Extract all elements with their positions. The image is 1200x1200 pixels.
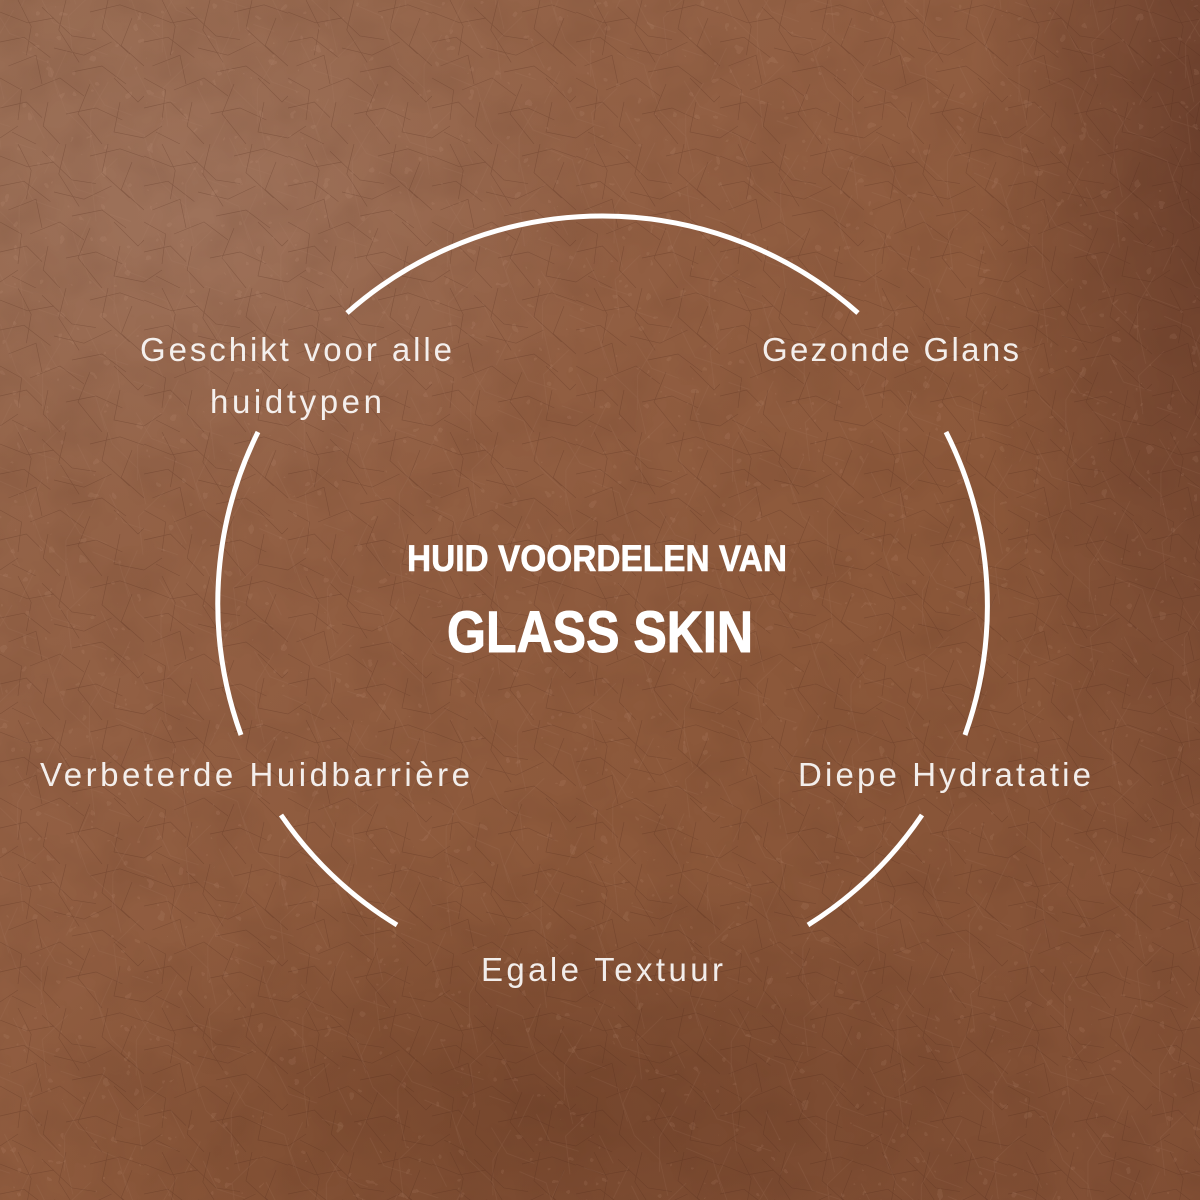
- circular ring made of five arcs: [218, 216, 987, 925]
- arc: lower left: [281, 815, 397, 925]
- arc: lower right: [808, 815, 922, 925]
- label: diepe hydratatie: Diepe Hydratatie: [798, 756, 1091, 793]
- heading: glass skin: GLASS SKIN: [447, 600, 753, 665]
- heading: huid voordelen van: HUID VOORDELEN VAN: [407, 538, 787, 579]
- label: egale textuur: Egale Textuur: [481, 951, 723, 988]
- label: verbeterde huidbarriere: Verbeterde Huidbarrière: [40, 756, 470, 793]
- arc: top: [347, 216, 858, 313]
- label: geschikt voor alle huidtypen: huidtypen: [210, 383, 382, 420]
- label: geschikt voor alle huidtypen: Geschikt voor alle: [140, 331, 452, 368]
- label: gezonde glans: Gezonde Glans: [762, 331, 1019, 368]
- arc: right: [946, 432, 987, 735]
- label: geschikt voor alle huidtypen: [140, 331, 452, 420]
- arc: left: [218, 432, 258, 735]
